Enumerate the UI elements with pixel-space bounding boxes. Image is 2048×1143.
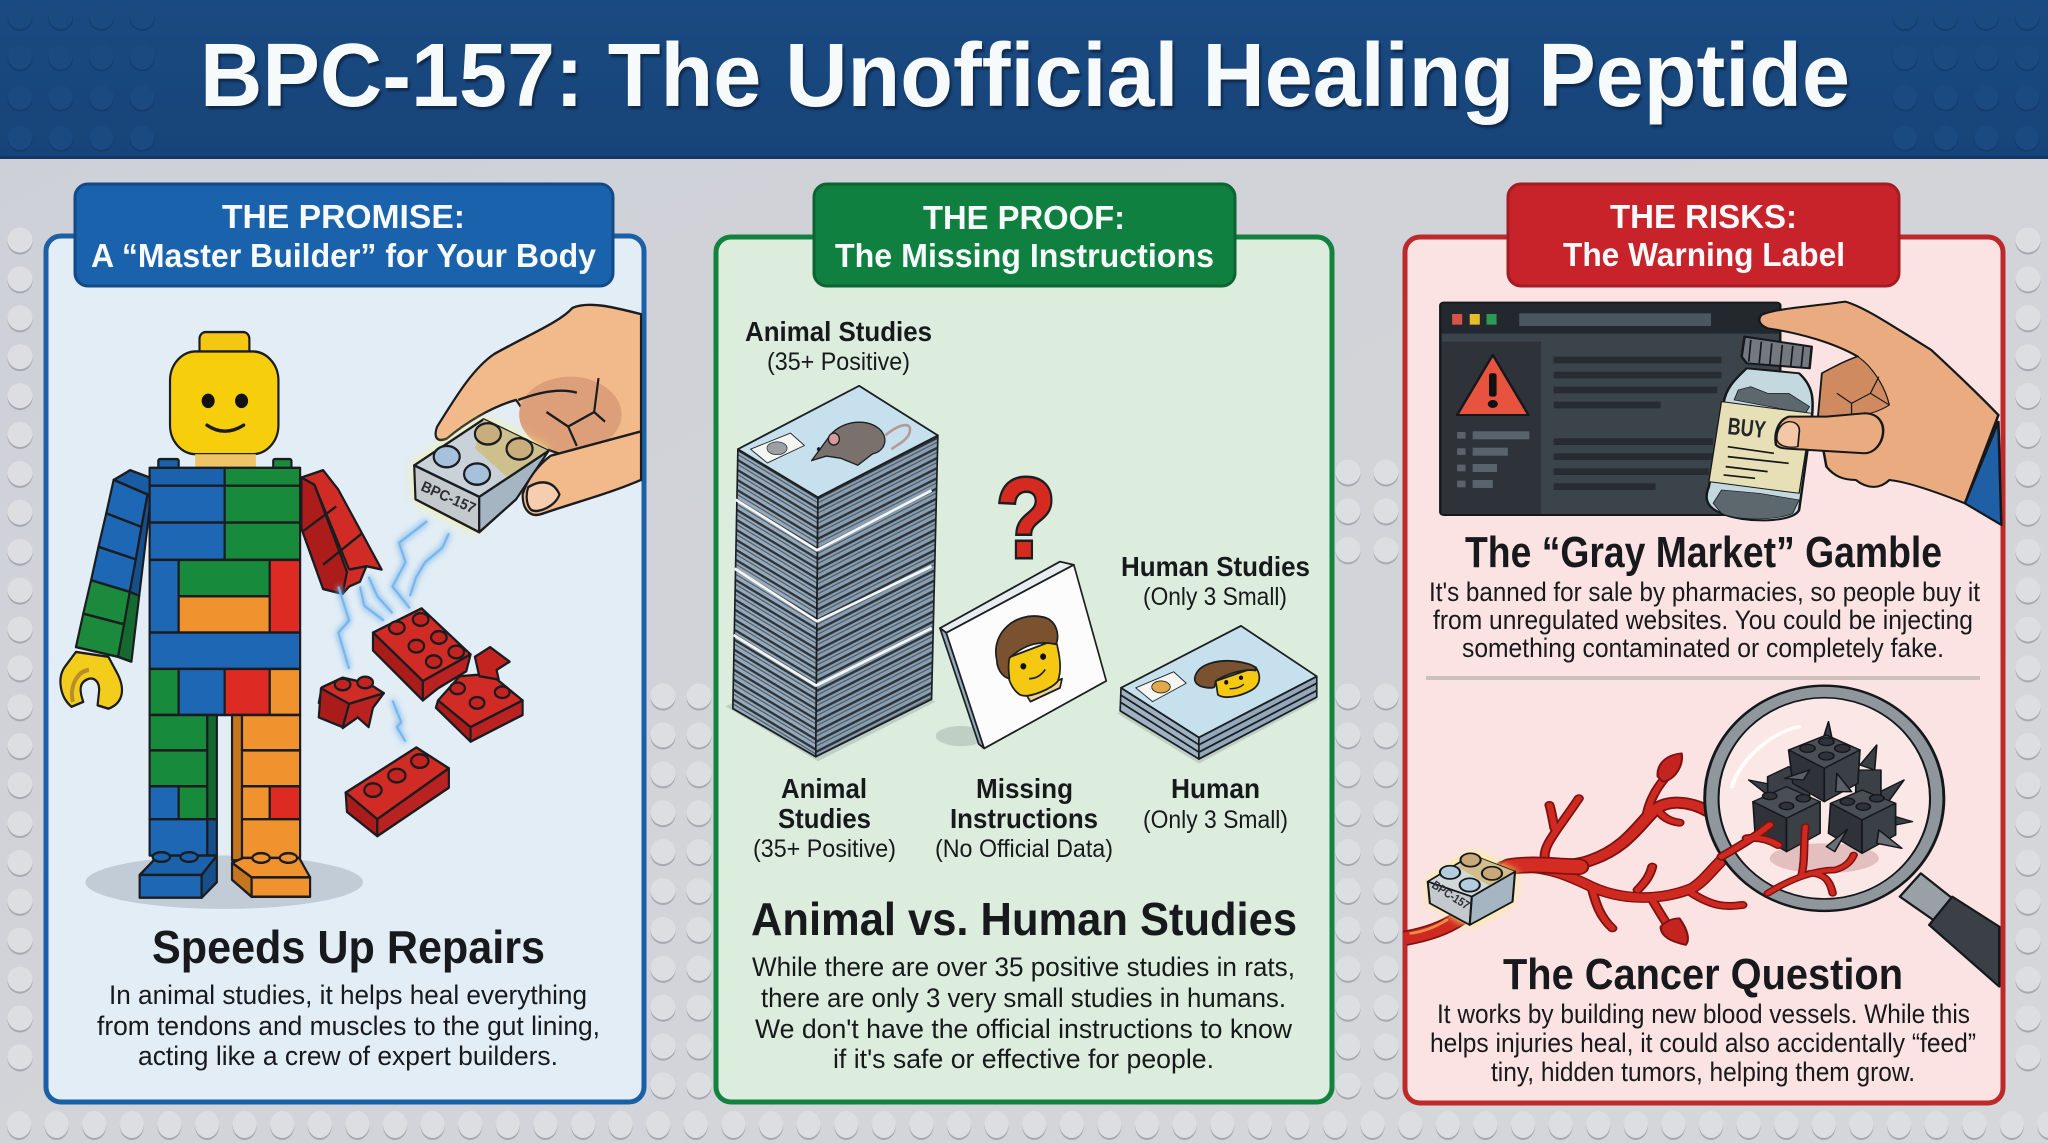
icon: hand holding BPC-157 brick	[414, 305, 641, 532]
body text: proof: there are only 3 very small studies in humans.	[761, 983, 1286, 1013]
right arm, broken	[301, 470, 382, 594]
label: animal studies top: Animal Studies	[745, 316, 932, 347]
panel: the proof	[716, 184, 1332, 1102]
body text: gray market	[1429, 577, 1980, 663]
body text: cancer question: helps injuries heal, it could also accidentally “feed”	[1430, 1028, 1976, 1058]
panel heading: the promise: THE PROMISE:	[222, 198, 465, 235]
label: animal studies top	[745, 316, 932, 376]
title: BPC-157: The Unofficial Healing Peptide	[200, 26, 1850, 126]
body text: promise: In animal studies, it helps heal everything	[109, 980, 587, 1010]
subheading: speeds up repairs: Speeds Up Repairs	[152, 921, 545, 973]
bottom labels: missing instructions: Instructions	[950, 803, 1098, 834]
label: human studies top	[1121, 551, 1310, 611]
icon: missing instructions booklet	[936, 562, 1106, 748]
bottom labels: missing instructions: Missing	[976, 773, 1073, 804]
body text: gray market: something contaminated or completely fake.	[1462, 633, 1944, 663]
body text: proof: We don't have the official instructions to know	[755, 1014, 1292, 1044]
body text: cancer question: It works by building new blood vessels. While this	[1437, 999, 1970, 1029]
illustration: gray market website	[1440, 303, 1780, 515]
warning triangle	[1457, 355, 1528, 415]
bottom labels: animal studies: Animal	[781, 773, 867, 804]
magnifier handle	[1900, 873, 1999, 987]
illustration: blood vessels and magnifier over tumor	[1405, 686, 1999, 987]
body text: promise	[97, 980, 600, 1071]
body text: proof	[752, 952, 1295, 1074]
panel: the promise	[46, 184, 644, 1102]
vessels inside lens	[1721, 825, 1854, 893]
bottom labels: missing instructions: (No Official Data)	[935, 835, 1113, 863]
body text: promise: from tendons and muscles to the gut lining,	[97, 1011, 600, 1041]
vessels behind lens	[1405, 773, 1742, 938]
body text: proof: if it's safe or effective for people.	[833, 1044, 1214, 1074]
icon: hand holding vial labelled buy: BUY	[1726, 413, 1767, 444]
bottom labels: human: Human	[1171, 773, 1260, 804]
body text: gray market: from unregulated websites. You could be injecting	[1433, 605, 1973, 635]
rat	[812, 422, 910, 465]
icon: small stack of human studies	[1117, 626, 1319, 764]
panel heading: the proof: THE PROOF:	[923, 199, 1125, 236]
illustration: brick minifigure	[60, 332, 382, 909]
bottom labels: human: (Only 3 Small)	[1143, 806, 1288, 834]
icon: red question mark: ?	[996, 455, 1056, 581]
icon: tall stack of animal studies with rat	[725, 386, 938, 761]
panel heading: the risks: THE RISKS:	[1610, 198, 1797, 235]
icon: scattered red bricks	[319, 608, 523, 836]
body text: promise: acting like a crew of expert builders.	[138, 1041, 558, 1071]
icon: hand holding BPC-157 brick: BPC-157	[418, 478, 478, 517]
label: human studies top: (Only 3 Small)	[1143, 583, 1287, 611]
panel heading: the risks	[1508, 184, 1899, 286]
icon: small BPC-157 brick: BPC-157	[1429, 878, 1472, 913]
bottom labels: animal studies: Studies	[778, 803, 871, 834]
torso bricks	[150, 468, 300, 715]
bottom labels: missing instructions	[935, 773, 1113, 863]
panel heading: the proof: The Missing Instructions	[835, 237, 1214, 274]
body text: cancer question: tiny, hidden tumors, helping them grow.	[1491, 1057, 1915, 1087]
body text: proof: While there are over 35 positive studies in rats,	[752, 952, 1295, 982]
subheading: the cancer question: The Cancer Question	[1503, 950, 1903, 999]
bottom labels: animal studies: (35+ Positive)	[753, 835, 896, 863]
subheading: gray market gamble: The “Gray Market” Gamble	[1465, 528, 1942, 577]
bottom labels: human	[1143, 773, 1288, 834]
label: human studies top: Human Studies	[1121, 551, 1310, 582]
label: animal studies top: (35+ Positive)	[767, 348, 910, 376]
panel heading: the proof	[814, 184, 1235, 286]
panel heading: the promise: A “Master Builder” for Your Body	[91, 237, 597, 274]
body text: gray market: It's banned for sale by pharmacies, so people buy it	[1429, 577, 1980, 607]
left arm	[60, 470, 151, 709]
icon: blue healing sparks	[338, 521, 449, 742]
header banner	[0, 0, 2048, 159]
legs	[140, 715, 310, 898]
bottom labels: animal studies	[753, 773, 896, 863]
panel heading: the risks: The Warning Label	[1563, 236, 1845, 273]
subheading: animal vs human studies: Animal vs. Human Studies	[751, 893, 1297, 945]
tumor bricks	[1749, 722, 1912, 853]
body text: cancer question	[1430, 999, 1976, 1087]
icon: hand holding vial labelled buy	[1707, 302, 2001, 525]
panel heading: the promise	[75, 184, 613, 286]
head	[200, 332, 249, 359]
panel: the risks	[1405, 184, 2003, 1103]
icon: small BPC-157 brick	[1428, 852, 1516, 927]
